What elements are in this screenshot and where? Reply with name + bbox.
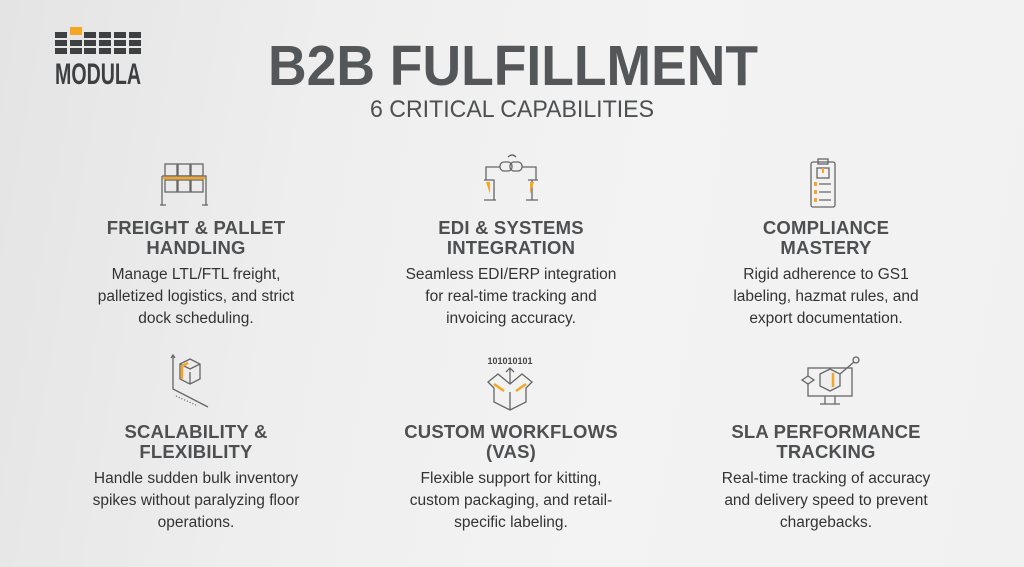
panel: freight: dock scheduling. xyxy=(138,310,254,327)
panel: freight xyxy=(98,217,294,327)
panel: SLA: SLA PERFORMANCE xyxy=(731,421,921,442)
panel: compliance: Rigid adherence to GS1 xyxy=(743,266,909,283)
panel: EDI xyxy=(406,217,616,327)
title: 6 CRITICAL CAPABILITIES xyxy=(370,96,654,123)
panel: EDI: Seamless EDI/ERP integration xyxy=(406,266,616,283)
panel: freight: HANDLING xyxy=(146,237,246,258)
panel: EDI: for real-time tracking and xyxy=(425,288,597,305)
panel: SLA: TRACKING xyxy=(776,441,876,462)
panel: scalability xyxy=(93,421,300,531)
panel: SLA: chargebacks. xyxy=(780,514,872,531)
panel: SLA xyxy=(722,421,930,531)
panel: freight: FREIGHT & PALLET xyxy=(107,217,285,238)
icon: integration xyxy=(484,154,538,201)
icon: custom workflows xyxy=(487,356,533,411)
panel: scalability: SCALABILITY & xyxy=(124,421,268,442)
panel: custom workflows xyxy=(404,421,618,531)
panel: SLA: Real-time tracking of accuracy xyxy=(722,470,930,487)
panel: compliance: COMPLIANCE xyxy=(763,217,889,238)
panel: compliance: labeling, hazmat rules, and xyxy=(733,288,919,305)
panel: EDI: EDI & SYSTEMS xyxy=(438,217,584,238)
panel: SLA: and delivery speed to prevent xyxy=(724,492,928,509)
panel: custom workflows: specific labeling. xyxy=(454,514,568,531)
panel: scalability: operations. xyxy=(158,514,234,531)
panel: scalability: Handle sudden bulk inventory xyxy=(94,470,298,487)
panel: compliance xyxy=(733,217,919,327)
panel: compliance: MASTERY xyxy=(780,237,872,258)
panel: scalability: FLEXIBILITY xyxy=(139,441,253,462)
icon: scalability xyxy=(170,354,208,408)
icon: clipboard xyxy=(810,158,836,208)
panel: custom workflows: custom packaging, and retail- xyxy=(410,492,612,509)
panel: EDI: invoicing accuracy. xyxy=(446,310,576,327)
panel: freight: palletized logistics, and strict xyxy=(98,288,294,305)
panel: custom workflows: Flexible support for kitting, xyxy=(421,470,601,487)
panel: EDI: INTEGRATION xyxy=(447,237,575,258)
logo xyxy=(55,27,141,87)
icon: SLA monitor xyxy=(801,356,860,405)
panel: scalability: spikes without paralyzing floor xyxy=(93,492,299,509)
icon: pallet xyxy=(160,163,208,206)
panel: compliance: export documentation. xyxy=(749,310,903,327)
icon: custom workflows: 101010101 xyxy=(487,356,533,366)
panel: freight: Manage LTL/FTL freight, xyxy=(112,266,280,283)
panel: custom workflows: (VAS) xyxy=(486,441,536,462)
panel: custom workflows: CUSTOM WORKFLOWS xyxy=(404,421,618,442)
